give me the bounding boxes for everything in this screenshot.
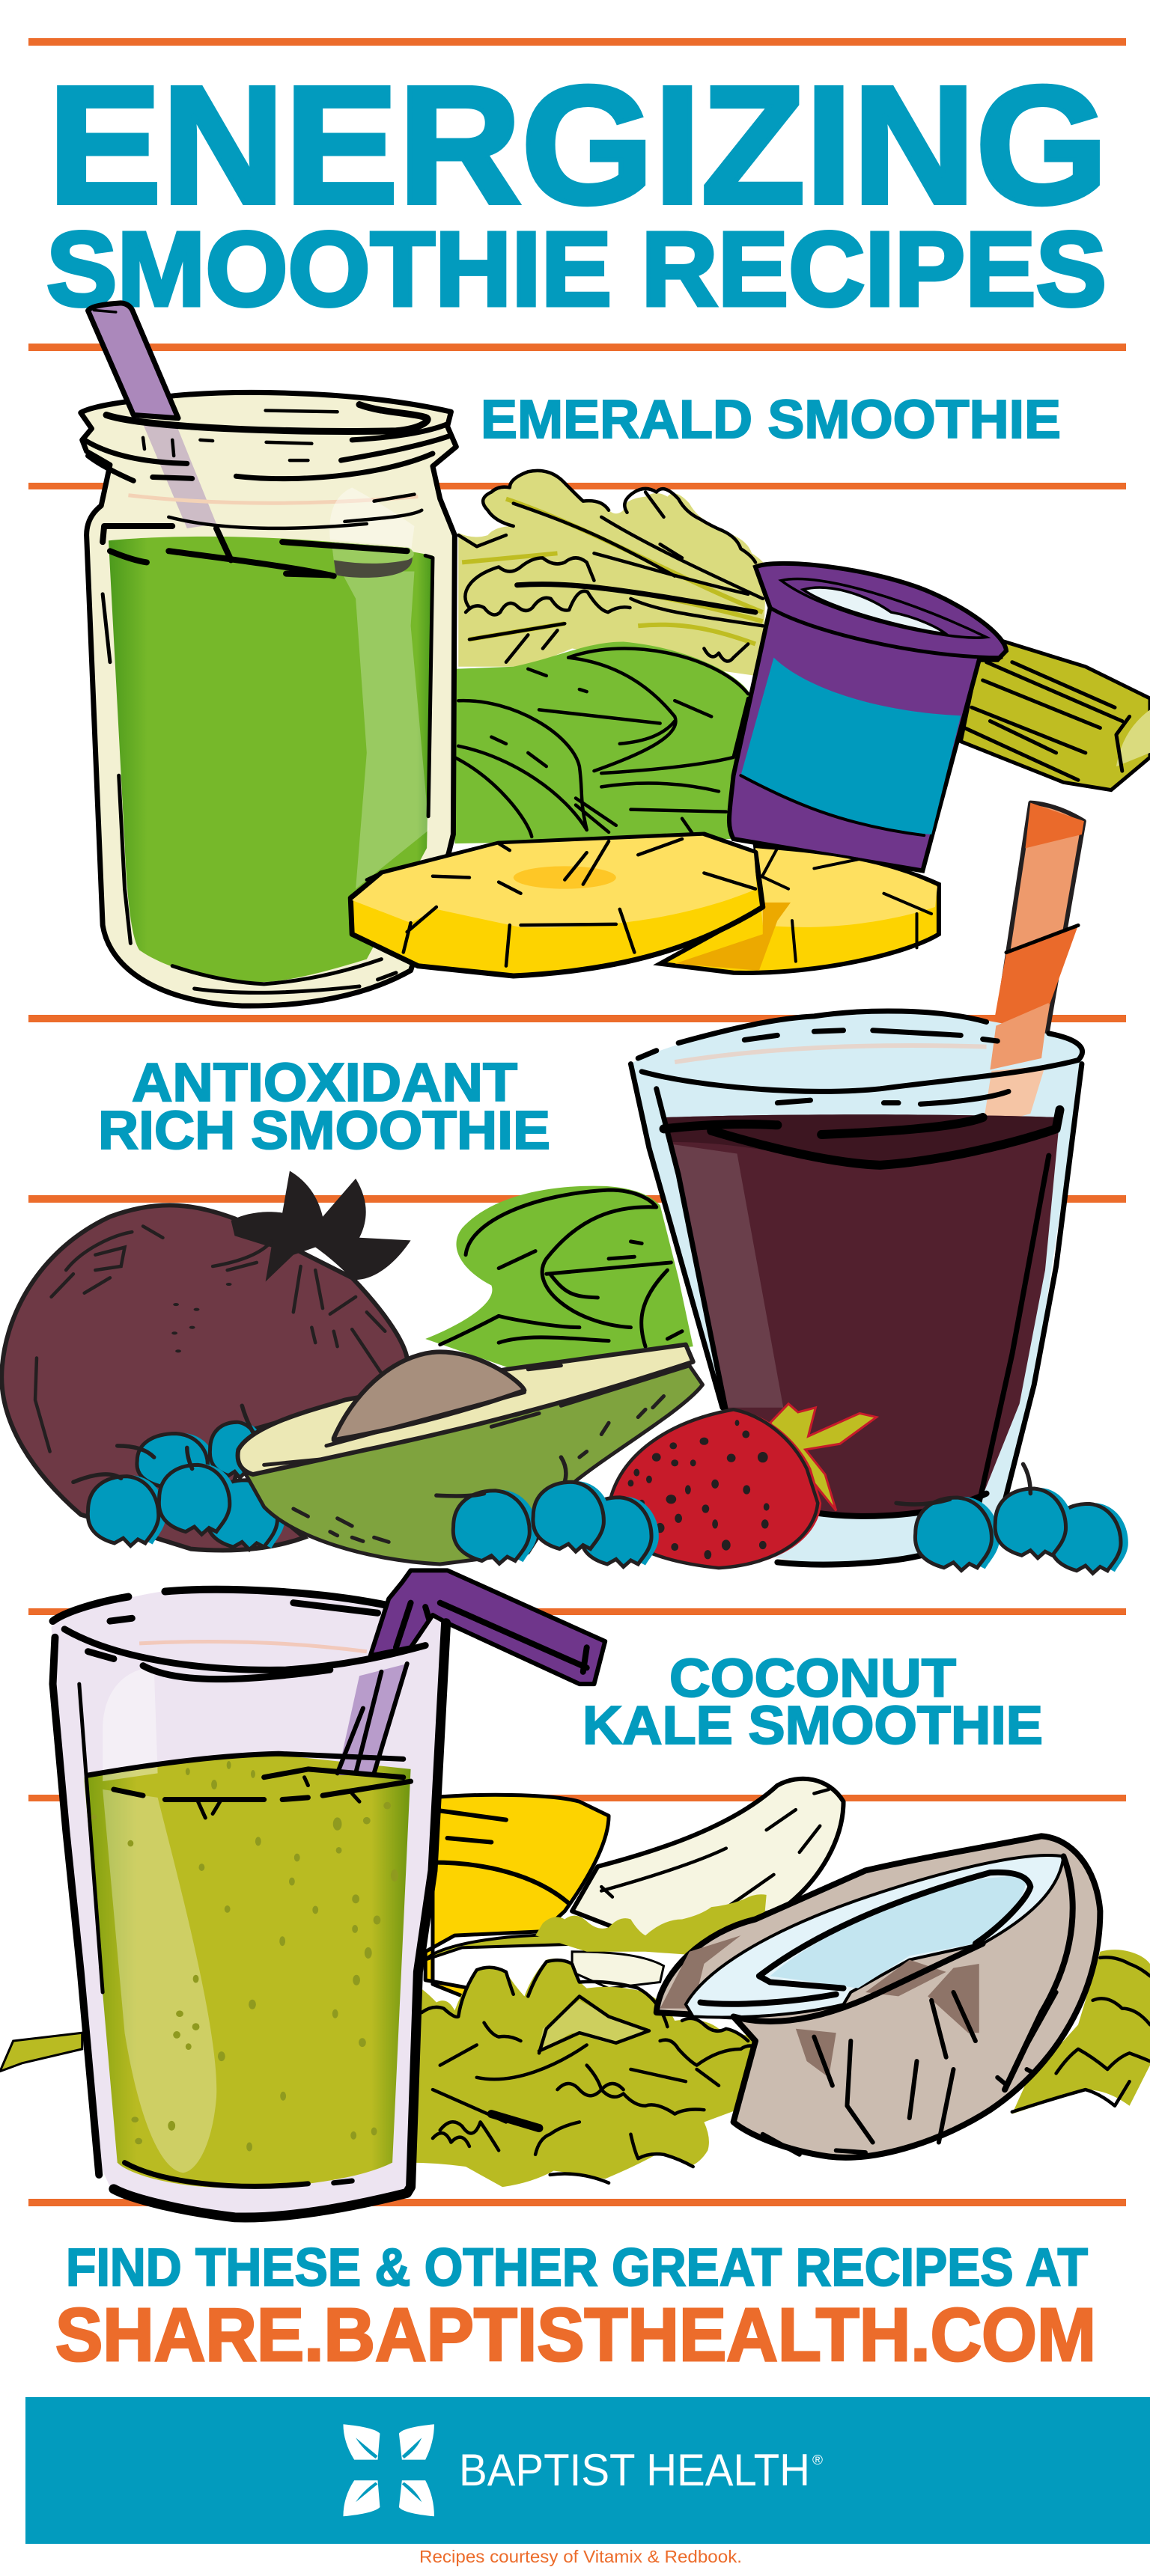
purple straw [88, 303, 216, 528]
purple bendy straw [338, 1570, 605, 1775]
tall glass with green juice [52, 1570, 605, 2218]
back blueberries [137, 1421, 285, 1550]
juice speckles [91, 1761, 398, 2151]
jar [81, 303, 456, 1006]
heading line one: ANTIOXIDANT [132, 1053, 517, 1113]
avocado half [238, 1345, 702, 1564]
logo icon [343, 2424, 434, 2516]
jar ink details [85, 405, 451, 992]
illustration: coconut kale smoothie [0, 1570, 1150, 2218]
tall glass with dark juice [630, 803, 1084, 1565]
title line one: ENERGIZING [48, 52, 1108, 239]
banana [572, 1779, 844, 1989]
yogurt cup [729, 564, 1006, 870]
illustration: antioxidant smoothie [1, 803, 1128, 1573]
mango [425, 1795, 609, 2017]
heading line two: KALE SMOOTHIE [582, 1696, 1043, 1756]
celery leaves [458, 471, 767, 676]
heading line one: COCONUT [669, 1649, 956, 1709]
heading: coconut kale smoothie [582, 1649, 1043, 1756]
website url: SHARE.BAPTISTHEALTH.COM [55, 2293, 1096, 2377]
green smoothie [109, 537, 433, 982]
glass ink outline [53, 1590, 446, 2218]
coconut [657, 1836, 1100, 2158]
strawberry [609, 1404, 877, 1569]
orange straw [990, 803, 1084, 1069]
front blueberries [73, 1405, 1128, 1573]
pineapple ring back [660, 846, 939, 973]
heading line two: RICH SMOOTHIE [98, 1101, 550, 1161]
spinach [454, 641, 752, 843]
credit line: Recipes courtesy of Vitamix & Redbook. [419, 2547, 742, 2566]
find these text: FIND THESE & OTHER GREAT RECIPES AT [66, 2238, 1088, 2298]
call to action text [55, 2238, 1096, 2377]
beet [1, 1171, 411, 1550]
heading: antioxidant rich smoothie [98, 1053, 550, 1161]
pineapple ring front [350, 834, 763, 976]
footer band [25, 2397, 1150, 2544]
illustration: emerald smoothie [81, 303, 1150, 1006]
spinach leaf [425, 1186, 693, 1370]
heading: emerald smoothie: EMERALD SMOOTHIE [481, 390, 1061, 450]
celery stalk [961, 635, 1150, 790]
registered mark: ® [812, 2453, 823, 2467]
title line two: SMOOTHIE RECIPES [46, 210, 1107, 328]
kale leaves [0, 1894, 1150, 2187]
title [46, 52, 1108, 328]
logo wordmark: BAPTIST HEALTH [459, 2445, 810, 2495]
